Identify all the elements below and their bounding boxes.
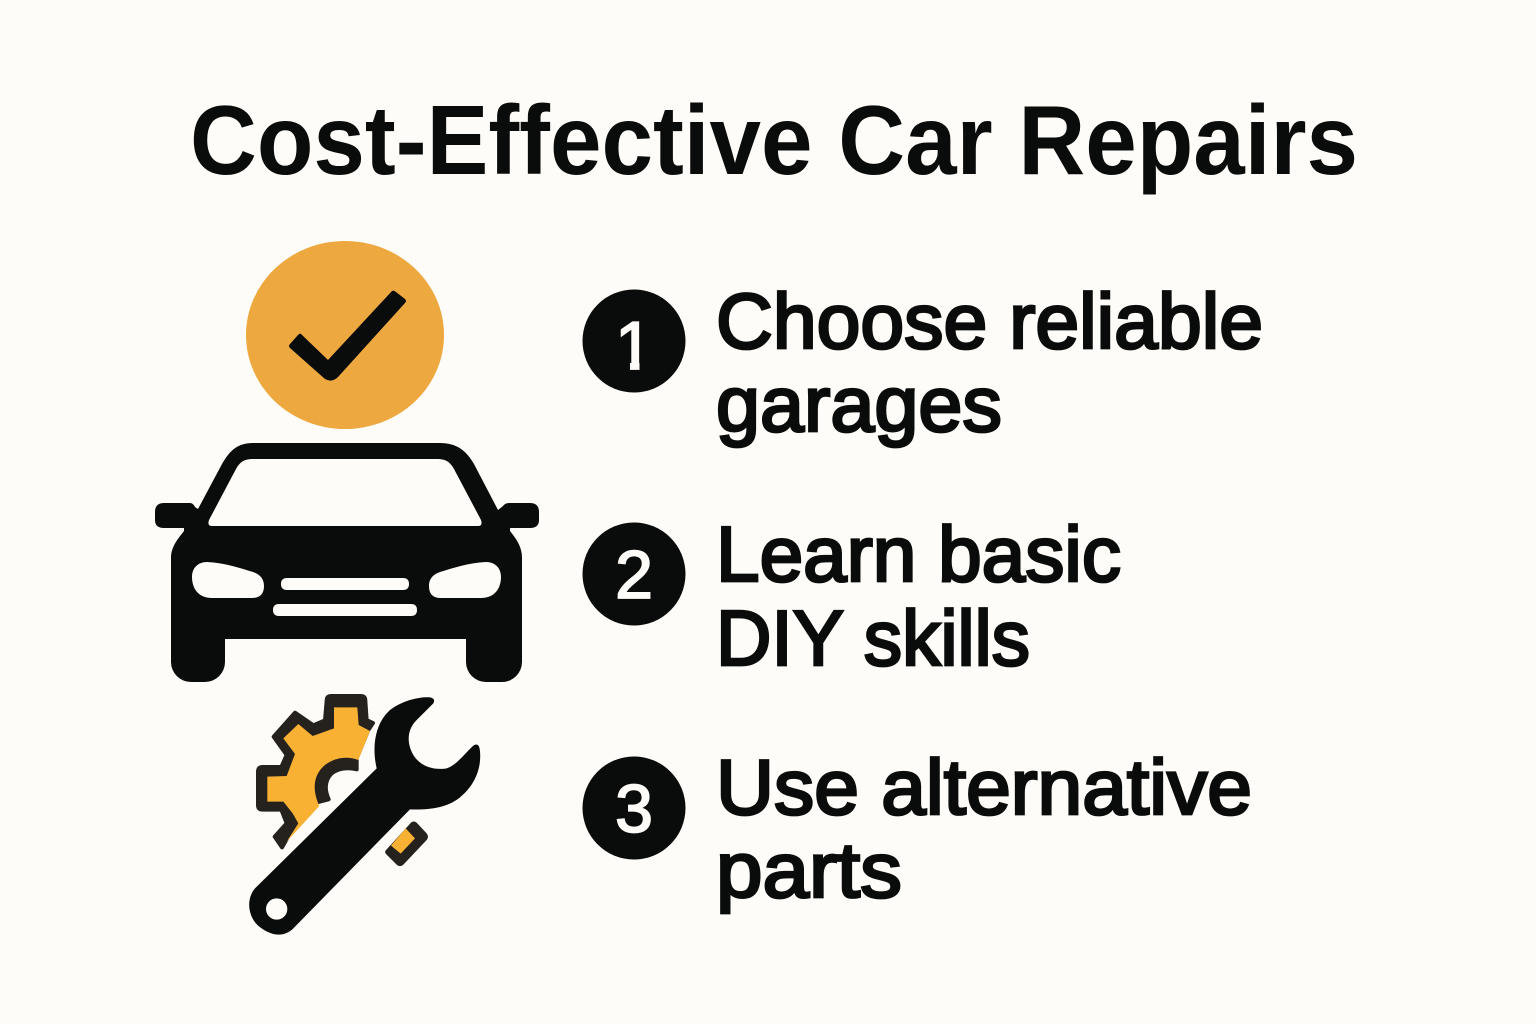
gear outline <box>258 696 373 847</box>
badge 3: 3 <box>615 771 653 847</box>
badge 1: 1 <box>615 308 653 384</box>
text: learn basic DIY skills: DIY skills <box>716 594 1030 682</box>
title: Cost-Effective Car Repairs <box>190 85 1358 195</box>
badge 2 <box>582 522 686 626</box>
icon: orange check badge <box>246 241 444 429</box>
text: learn basic DIY skills <box>716 510 1121 682</box>
step 3 <box>582 743 1252 914</box>
text: choose reliable garages <box>716 277 1263 448</box>
step 1 <box>582 277 1263 448</box>
text: use alternative parts: parts <box>716 826 902 914</box>
text: choose reliable garages: garages <box>716 360 1002 448</box>
badge 1 <box>582 290 686 392</box>
badge 2: 2 <box>615 537 653 613</box>
text: use alternative parts <box>716 743 1252 914</box>
gear fill <box>267 707 370 842</box>
text: learn basic DIY skills: Learn basic <box>716 510 1121 598</box>
icon: car front view <box>155 443 539 682</box>
step 2 <box>582 510 1121 682</box>
wrench <box>249 697 480 935</box>
small part <box>385 821 428 866</box>
icon: gear and wrench <box>249 696 480 935</box>
text: use alternative parts: Use alternative <box>716 743 1252 831</box>
text: choose reliable garages: Choose reliable <box>716 277 1263 365</box>
badge 3 <box>582 756 686 860</box>
